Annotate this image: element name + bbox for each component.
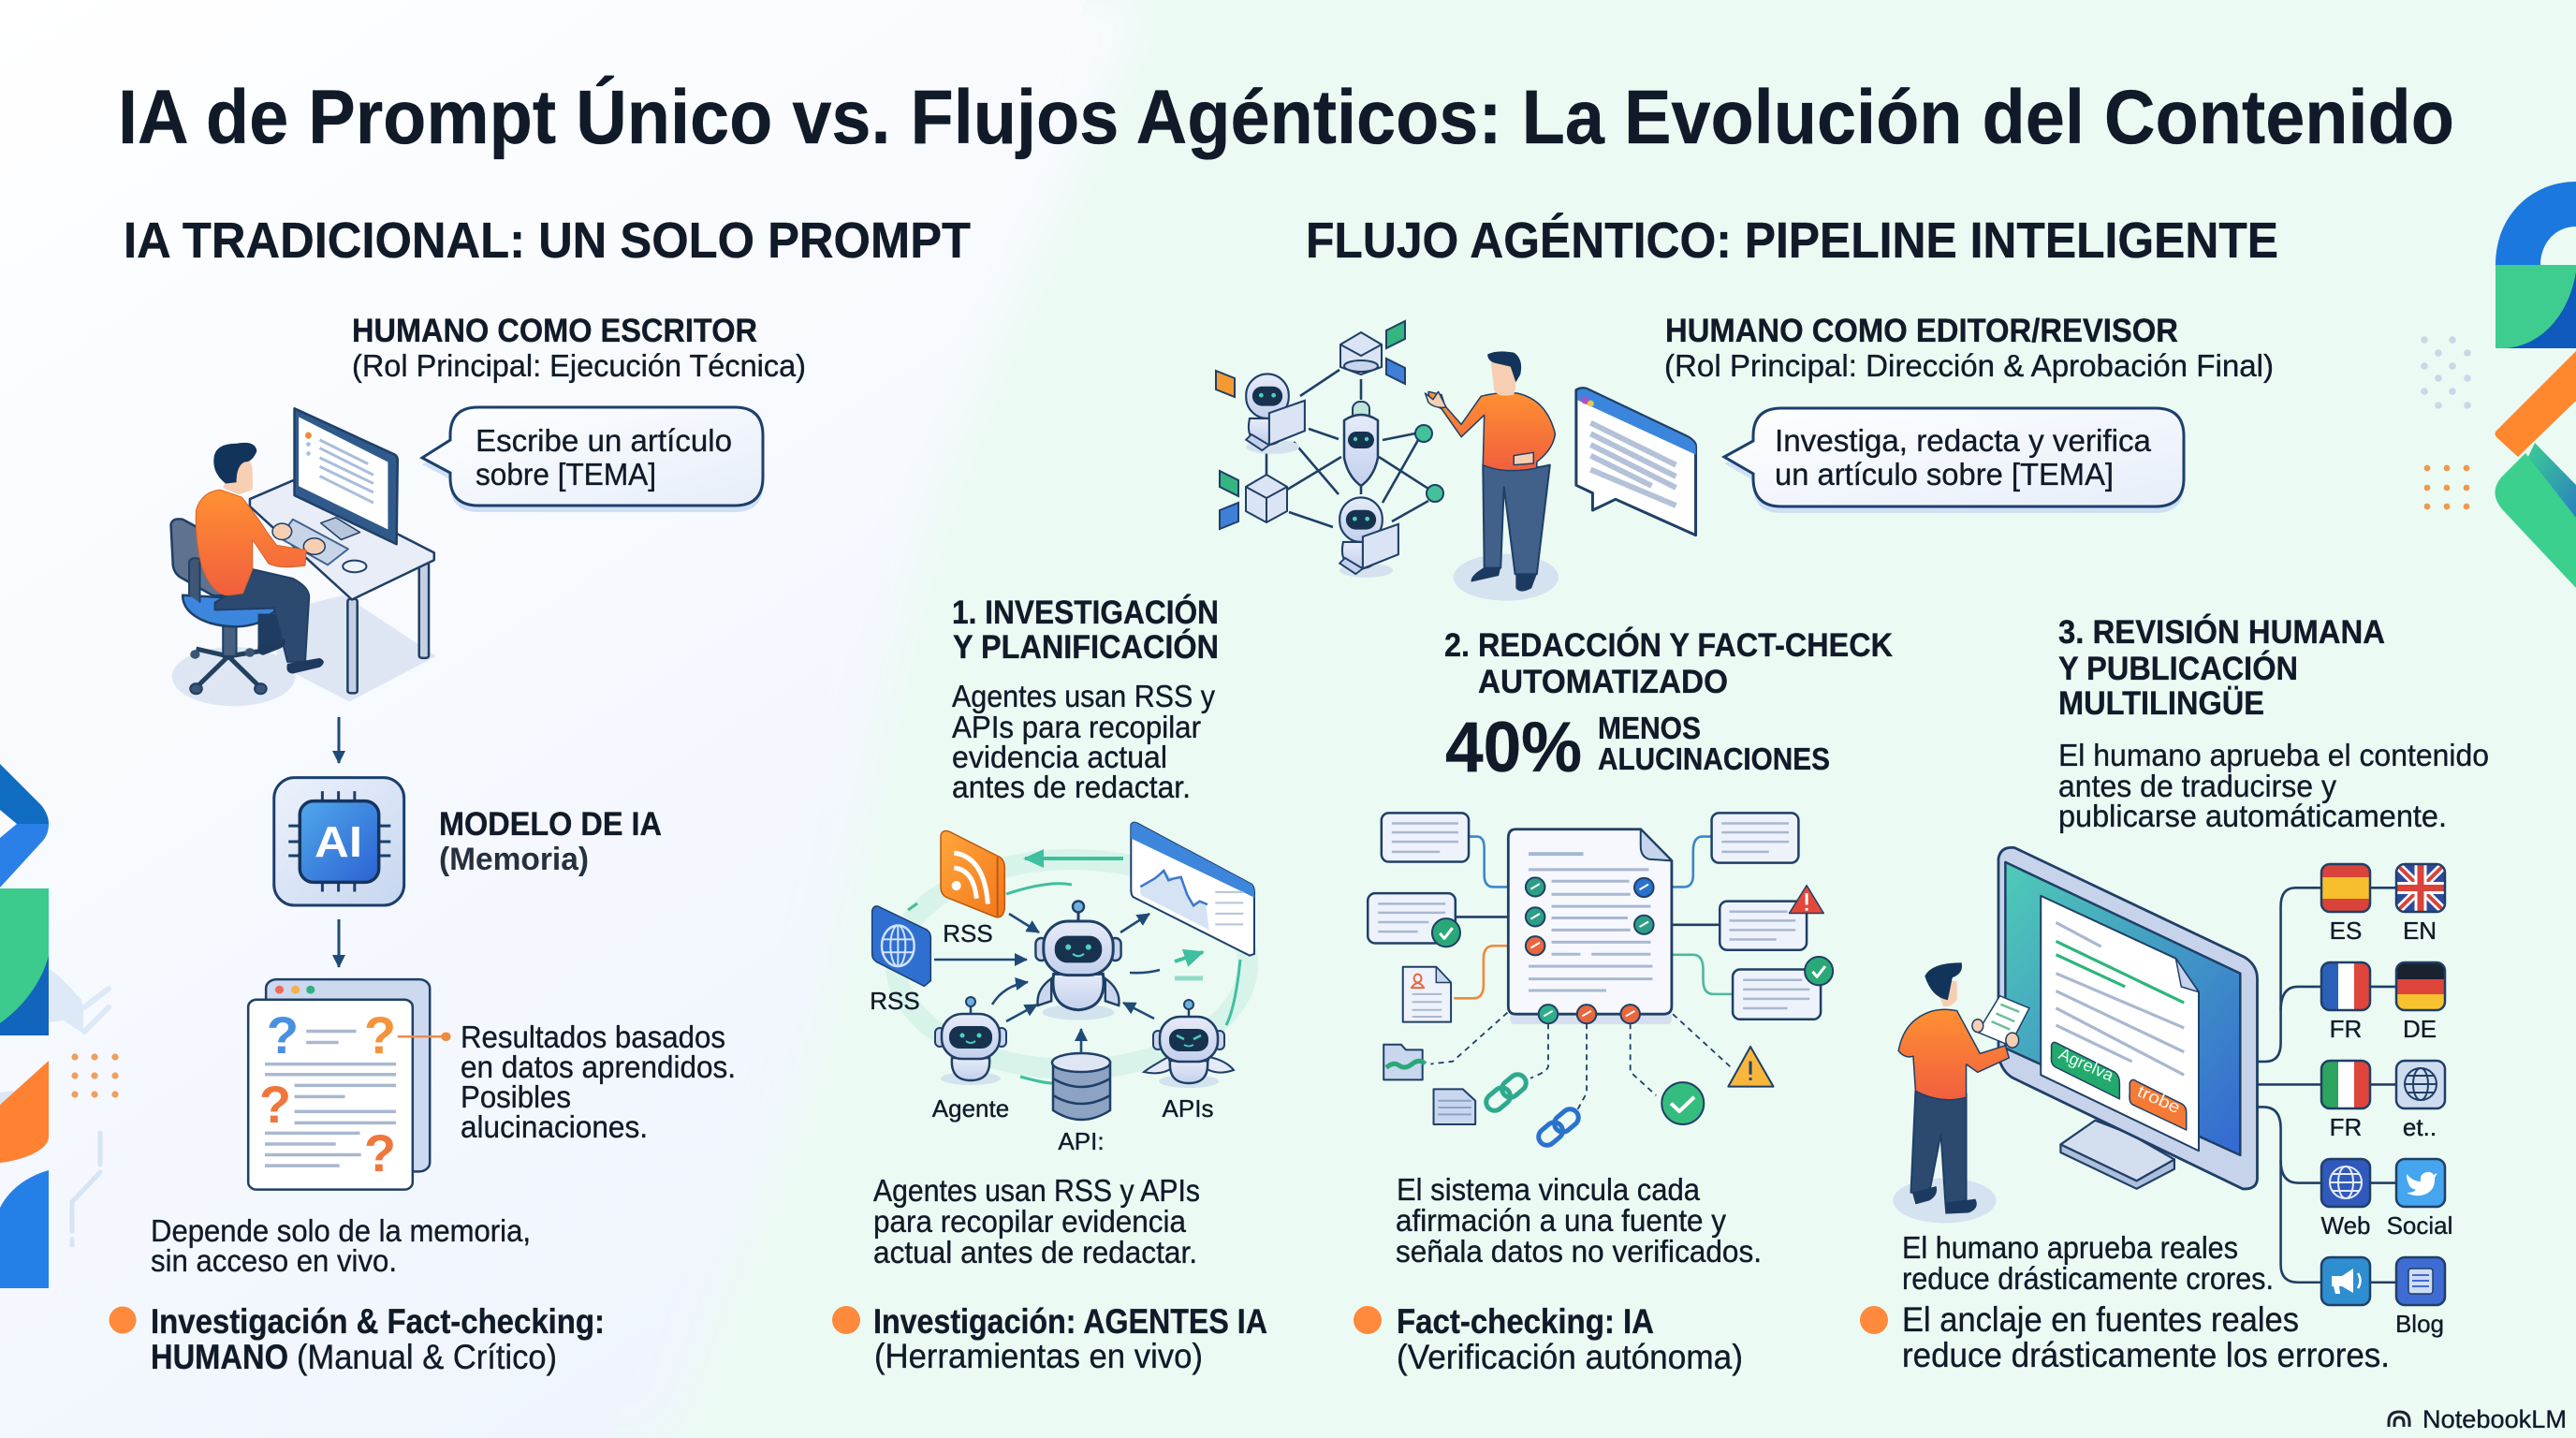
text: step 3 intro: antes de traducirse y	[2058, 769, 2336, 803]
small doc	[1403, 967, 1451, 1022]
icon: web globe	[2321, 1159, 2370, 1207]
diagram labels: APIs	[1163, 1094, 1213, 1123]
big check	[1661, 1082, 1704, 1124]
text: step 1 intro: evidencia actual	[952, 740, 1167, 774]
stat: 40% fewer hallucinations: MENOS	[1598, 711, 1701, 745]
icon: lower cube	[1246, 475, 1287, 522]
icon: side tiles	[1216, 321, 1405, 529]
language and channel labels: DE	[2403, 1015, 2437, 1043]
heading: step 3: 3. REVISIÓN HUMANA	[2058, 613, 2385, 651]
warning triangle	[1728, 1047, 1774, 1087]
human as writer label	[352, 313, 806, 383]
title: IA de Prompt Único vs. Flujos Agénticos: La Evolución del Contenido	[118, 75, 2454, 160]
callout: research human: (Manual & Crítico)	[297, 1338, 557, 1376]
robot: central agent	[1035, 901, 1121, 1020]
illustration: human reviewing document on monitor	[1893, 847, 2257, 1223]
connectors to languages and channels	[2257, 888, 2396, 1283]
illustration: standing human editor	[1426, 351, 1559, 601]
callout: fact-checking AI	[1354, 1302, 1743, 1376]
speech bubble: agentic prompt: Investiga, redacta y verifica	[1775, 423, 2152, 458]
text: step 3 intro: publicarse automáticamente.	[2058, 799, 2447, 833]
robot: agent	[935, 997, 1006, 1085]
icon: flag Spain	[2321, 864, 2370, 912]
icon: flag France	[2321, 962, 2370, 1010]
icon: RSS tile	[941, 831, 1004, 917]
icon: network nodes	[1415, 425, 1443, 502]
text: step 1 description: para recopilar evidencia	[873, 1204, 1187, 1239]
icon: chat window	[1576, 389, 1696, 536]
diagram labels	[870, 919, 1213, 1155]
callout: research agents	[832, 1302, 1267, 1375]
language and channel labels: et..	[2403, 1113, 2437, 1141]
icon: green chain link	[1483, 1071, 1530, 1114]
callout: source anchoring	[1860, 1300, 2390, 1374]
human as editor label	[1664, 313, 2274, 383]
icon: social bird	[2396, 1159, 2445, 1207]
decoration: left edge shapes	[0, 764, 119, 1288]
arrow: model to output	[337, 919, 341, 967]
callout: fact-checking AI: Fact-checking: IA	[1397, 1302, 1654, 1341]
language and channel labels: Social	[2387, 1211, 2452, 1240]
speech bubble: prompt	[422, 407, 763, 512]
icon: upper cube	[1340, 332, 1382, 374]
callout: research human	[109, 1302, 605, 1376]
icon: flag UK	[2396, 864, 2445, 912]
illustration: human reviewing document on monitor: trobe	[2134, 1081, 2183, 1117]
heading: step 2: 2. REDACCIÓN Y FACT-CHECK	[1444, 626, 1893, 664]
text: step 1 description: actual antes de redactar.	[873, 1235, 1197, 1269]
connectors	[1430, 837, 1733, 1111]
decoration: right edge shapes	[2421, 182, 2576, 588]
label: AI model: MODELO DE IA	[439, 806, 662, 843]
panel: step 1 research	[832, 594, 1267, 1375]
diagram labels: API:	[1058, 1127, 1105, 1155]
logo: NotebookLM: NotebookLM	[2422, 1405, 2567, 1433]
heading: agentic flow: FLUJO AGÉNTICO: PIPELINE INTELIGENTE	[1306, 213, 2278, 269]
text: step 3 intro	[2058, 738, 2489, 833]
icon: output document with question marks	[248, 979, 451, 1190]
icon: globe tile light	[2396, 1061, 2445, 1108]
text: learned-data results: en datos aprendidos.	[461, 1049, 736, 1084]
text: step 3 intro: El humano aprueba el contenido	[2058, 738, 2489, 772]
speech bubble: agentic prompt: un artículo sobre [TEMA]	[1775, 457, 2114, 492]
language and channel labels	[2321, 917, 2452, 1338]
speech bubble: prompt: Escribe un artículo	[476, 423, 732, 458]
stat: 40% fewer hallucinations	[1445, 708, 1830, 787]
text: step 3 description: reduce drásticamente crores.	[1902, 1261, 2274, 1296]
main document	[1508, 829, 1672, 1014]
panel: step 2 drafting and fact-check	[1354, 626, 1893, 1376]
text: step 2 description: señala datos no verificados.	[1396, 1234, 1762, 1269]
diagram labels: RSS	[943, 919, 993, 947]
icon: flag Germany	[2396, 962, 2445, 1010]
folder	[1383, 1045, 1423, 1079]
language and channel labels: FR	[2330, 1113, 2362, 1141]
icon: blue chain link	[1535, 1106, 1582, 1149]
text: step 1 intro: APIs para recopilar	[952, 710, 1201, 744]
icon: chart panel	[1131, 823, 1254, 956]
diagram: agent research loop	[870, 823, 1254, 1155]
diagram labels: Agente	[932, 1094, 1009, 1123]
text: depends only on memory: sin acceso en vivo.	[151, 1243, 397, 1278]
text: step 1 description: Agentes usan RSS y APIs	[873, 1173, 1200, 1208]
text: depends only on memory: Depende solo de la memoria,	[151, 1213, 531, 1248]
panel: step 3 human review	[1860, 613, 2489, 1374]
language and channel labels: Blog	[2395, 1310, 2444, 1338]
label: AI model: (Memoria)	[439, 842, 589, 877]
callout: source anchoring: El anclaje en fuentes reales	[1902, 1300, 2299, 1339]
human as editor label: (Rol Principal: Dirección & Aprobación Final)	[1664, 348, 2274, 383]
icon: megaphone	[2321, 1257, 2370, 1305]
robot: laptop agent bottom	[1339, 497, 1398, 578]
diagram: document with verified sources	[1368, 813, 1833, 1149]
heading: traditional AI: IA TRADICIONAL: UN SOLO PROMPT	[124, 213, 971, 269]
callout: research human: Investigación & Fact-checking:	[151, 1302, 605, 1341]
document	[1434, 1089, 1475, 1124]
icon: flag Italy	[2321, 1061, 2370, 1108]
icon: AI chip	[274, 778, 404, 905]
robot: laptop agent top	[1246, 374, 1305, 454]
text: step 1 intro	[952, 679, 1215, 804]
robot: center agent	[1344, 402, 1378, 486]
icon: AI chip: AI	[315, 817, 362, 866]
text: step 2 description	[1396, 1172, 1762, 1269]
icon: output document with question marks: ?	[364, 1005, 396, 1064]
text: step 1 description	[873, 1173, 1200, 1269]
label: AI model	[439, 806, 662, 877]
speech bubble: agentic prompt	[1724, 408, 2184, 513]
human as writer label: (Rol Principal: Ejecución Técnica)	[352, 348, 806, 383]
language and channel labels: ES	[2330, 917, 2362, 945]
text: step 2 description: afirmación a una fuente y	[1396, 1203, 1726, 1238]
text: step 1 intro: antes de redactar.	[952, 770, 1191, 804]
source cards	[1368, 813, 1821, 1020]
illustration: agent network	[1216, 321, 1443, 578]
nodes	[1526, 877, 1654, 1023]
icon: output document with question marks: ?	[364, 1123, 396, 1182]
text: learned-data results: Posibles	[461, 1079, 571, 1114]
diagram labels: RSS	[870, 987, 920, 1015]
heading: step 2: AUTOMATIZADO	[1478, 664, 1728, 700]
callout: research human: HUMANO	[151, 1338, 288, 1376]
heading: step 3: Y PUBLICACIÓN	[2058, 650, 2298, 687]
icon: database	[1052, 1053, 1110, 1120]
heading: step 3	[2058, 613, 2385, 722]
human as writer label: HUMANO COMO ESCRITOR	[352, 313, 757, 349]
stat: 40% fewer hallucinations: 40%	[1445, 708, 1582, 787]
callout: source anchoring: reduce drásticamente los errores.	[1902, 1336, 2390, 1374]
icon: blog	[2396, 1257, 2445, 1305]
arrow: human to model	[337, 717, 341, 763]
callout: research agents: (Herramientas en vivo)	[874, 1337, 1203, 1375]
robot: APIs agent	[1144, 1000, 1234, 1088]
human as editor label: HUMANO COMO EDITOR/REVISOR	[1665, 313, 2178, 349]
text: step 2 description: El sistema vincula cada	[1397, 1172, 1701, 1207]
text: learned-data results: Resultados basados	[461, 1020, 725, 1054]
language and channel labels: FR	[2330, 1015, 2362, 1043]
heading: step 1	[952, 594, 1219, 666]
heading: step 2	[1444, 626, 1893, 700]
text: depends only on memory	[151, 1213, 531, 1278]
text: step 3 description: El humano aprueba reales	[1902, 1230, 2238, 1265]
callout: fact-checking AI: (Verificación autónoma)	[1397, 1338, 1743, 1376]
heading: step 3: MULTILINGÜE	[2058, 685, 2264, 722]
arrows: inputs to central agent	[934, 914, 1154, 1053]
text: step 3 description	[1902, 1230, 2274, 1296]
illustration: human reviewing document on monitor: Agrelva	[2056, 1044, 2117, 1085]
icon: output document with question marks: ?	[267, 1005, 299, 1064]
stat: 40% fewer hallucinations: ALUCINACIONES	[1598, 741, 1830, 776]
panel: agentic pipeline header	[1216, 313, 2274, 601]
heading: step 1: 1. INVESTIGACIÓN	[952, 594, 1219, 631]
icon: web tile	[872, 906, 930, 986]
check and warning badges	[1432, 918, 1460, 946]
text: step 1 intro: Agentes usan RSS y	[952, 679, 1215, 713]
heading: step 1: Y PLANIFICACIÓN	[953, 628, 1219, 666]
callout: research agents: Investigación: AGENTES IA	[873, 1302, 1267, 1341]
illustration: person typing at desk	[171, 408, 436, 706]
language and channel labels: EN	[2403, 917, 2437, 945]
icon: output document with question marks: ?	[259, 1075, 291, 1134]
text: learned-data results	[461, 1020, 736, 1144]
text: learned-data results: alucinaciones.	[461, 1109, 648, 1144]
speech bubble: prompt: sobre [TEMA]	[476, 457, 656, 492]
language and channel labels: Web	[2321, 1211, 2370, 1240]
panel: traditional AI	[109, 313, 806, 1376]
